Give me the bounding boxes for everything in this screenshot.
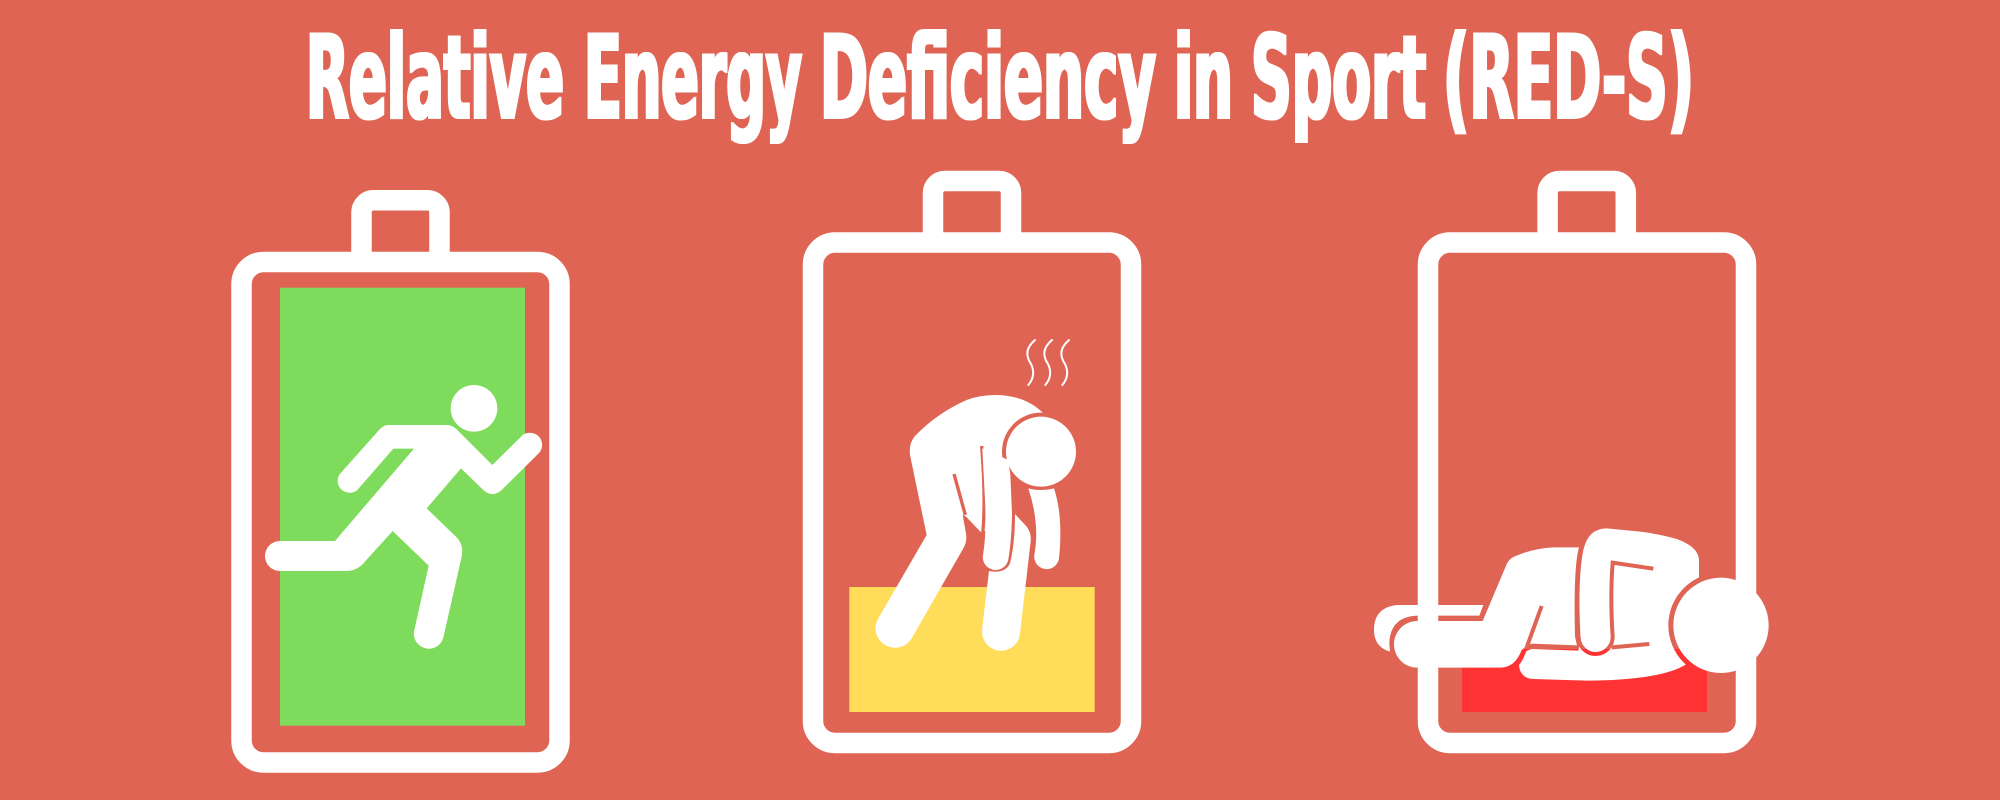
icon: exhausted bent-over person [876,340,1076,651]
title: Energy [584,12,802,146]
full charge level [280,288,525,726]
panel: empty battery with collapsed person [1374,181,1769,743]
panel: full battery with runner [242,200,560,763]
title [306,12,1694,146]
text: (RED-S) [1443,12,1694,146]
medium charge level [849,587,1095,712]
battery outline [1428,181,1746,743]
battery outline [813,181,1131,743]
title: Sport [1251,12,1426,146]
battery outline [242,200,560,763]
title: Deficiency [820,12,1156,146]
icon: collapsed person lying down [1374,528,1769,681]
title: in [1174,12,1233,146]
icon: sweat lines [1027,340,1069,385]
icon: running person [265,385,542,649]
panel: medium battery with exhausted person [813,181,1131,743]
title: Relative [306,12,564,146]
low charge level [1462,649,1707,712]
